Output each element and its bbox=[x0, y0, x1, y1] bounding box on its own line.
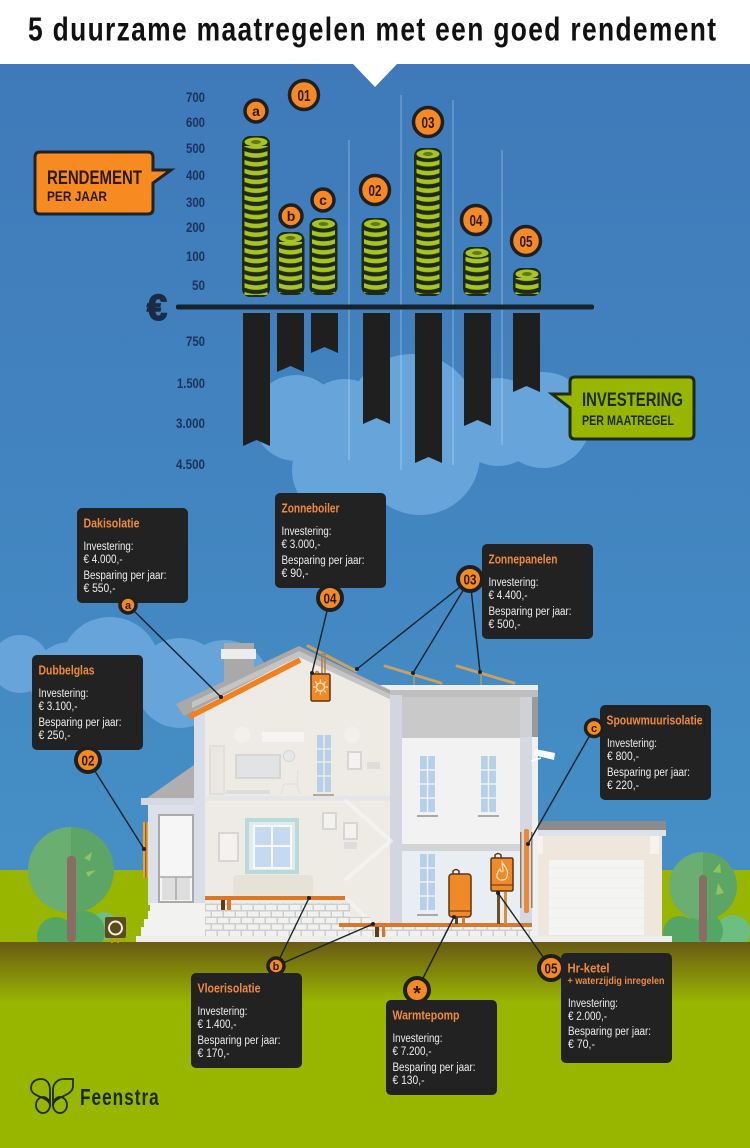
panel: Warmtepomp: € 7.200,- bbox=[392, 1046, 432, 1058]
investment axis labels: 4.500 bbox=[176, 456, 205, 472]
axis line bbox=[176, 304, 594, 310]
panel: Hr-ketel bbox=[561, 953, 672, 1063]
logo: Feenstra: Feenstra bbox=[80, 1086, 159, 1111]
panel: Hr-ketel: Besparing per jaar: bbox=[568, 1026, 651, 1038]
panel: Warmtepomp: € 130,- bbox=[392, 1075, 425, 1087]
chimney bbox=[221, 643, 256, 687]
panel: Zonneboiler: Besparing per jaar: bbox=[282, 555, 364, 567]
roof bbox=[176, 646, 390, 716]
solar panels bbox=[308, 646, 514, 684]
callout: investering per maatregel: INVESTERING bbox=[582, 390, 683, 411]
callout: rendement per jaar bbox=[35, 152, 171, 214]
chart badge c: c bbox=[319, 192, 327, 208]
marker b bbox=[268, 958, 284, 974]
marker 02: 02 bbox=[82, 754, 94, 770]
return axis labels: 400 bbox=[186, 167, 205, 183]
marker c bbox=[586, 720, 602, 736]
panel: Spouwmuurisolatie: Investering: bbox=[607, 738, 657, 750]
porch bbox=[141, 765, 205, 937]
panel: Zonneboiler: € 90,- bbox=[282, 568, 309, 580]
cloud behind house bbox=[0, 617, 270, 730]
marker heat pump bbox=[405, 978, 429, 1005]
panel: Zonnepanelen bbox=[482, 544, 593, 639]
chart badge 01: 01 bbox=[298, 88, 311, 105]
coin stack b bbox=[276, 232, 304, 295]
investment axis labels: 1.500 bbox=[177, 375, 205, 391]
panel: Vloerisolatie: € 1.400,- bbox=[198, 1019, 237, 1031]
callout: investering per maatregel: PER MAATREGEL bbox=[582, 412, 674, 428]
return axis labels: 100 bbox=[186, 248, 205, 264]
ground floor insulation bbox=[205, 896, 532, 937]
background: soil and lawn bbox=[0, 942, 750, 1148]
chart badge 04: 04 bbox=[470, 213, 483, 230]
chart badge a: a bbox=[252, 103, 260, 119]
chart badge 05: 05 bbox=[520, 234, 533, 251]
marker a bbox=[120, 597, 136, 613]
panel: Spouwmuurisolatie: € 220,- bbox=[607, 780, 639, 792]
return axis labels: 200 bbox=[186, 219, 205, 235]
panel: Dakisolatie: € 4.000,- bbox=[84, 554, 123, 566]
investment axis labels: 3.000 bbox=[176, 415, 205, 431]
panel: Vloerisolatie: Investering: bbox=[198, 1006, 248, 1018]
chart badge 01 bbox=[290, 80, 318, 110]
marker 02 bbox=[76, 748, 100, 772]
panel: Zonneboiler: Zonneboiler bbox=[282, 502, 340, 516]
chart badge c bbox=[312, 189, 334, 211]
panel: Warmtepomp: Investering: bbox=[392, 1033, 442, 1045]
return axis labels: 500 bbox=[186, 140, 205, 156]
marker c: c bbox=[591, 723, 597, 735]
heat pump icon bbox=[449, 870, 471, 924]
panel: Dakisolatie bbox=[77, 508, 188, 603]
investment axis labels bbox=[176, 333, 205, 472]
coin stacks chart bbox=[242, 136, 541, 297]
tree left bbox=[28, 827, 118, 955]
panel: Warmtepomp: Warmtepomp bbox=[392, 1008, 460, 1022]
wall cavity insulation bbox=[520, 829, 532, 913]
coin stack c bbox=[310, 218, 338, 295]
right block bbox=[372, 685, 538, 942]
euro sign: € bbox=[147, 287, 167, 328]
panel: Hr-ketel: Investering: bbox=[568, 998, 618, 1010]
title banner: 5 duurzame maatregelen met een goed rendement bbox=[28, 12, 716, 48]
return axis labels: 50 bbox=[192, 277, 205, 293]
double glazing strip bbox=[143, 822, 148, 878]
panel: Hr-ketel: € 2.000,- bbox=[568, 1011, 607, 1023]
marker heat pump: * bbox=[413, 983, 421, 1005]
panel: Warmtepomp: Besparing per jaar: bbox=[392, 1062, 476, 1074]
chart badge b bbox=[280, 205, 302, 227]
leader lines bbox=[88, 579, 594, 990]
panel: Dubbelglas bbox=[32, 655, 143, 750]
panel: Spouwmuurisolatie: € 800,- bbox=[607, 751, 639, 763]
panel: Spouwmuurisolatie: Besparing per jaar: bbox=[607, 767, 690, 779]
roof insulation bbox=[189, 660, 300, 717]
panel: Warmtepomp bbox=[386, 1000, 497, 1095]
panel: Hr-ketel: € 70,- bbox=[568, 1039, 595, 1051]
chart badge 02 bbox=[360, 176, 390, 204]
chart badge 05 bbox=[512, 226, 540, 256]
panel: Dubbelglas: € 250,- bbox=[38, 730, 71, 742]
leader line end dots bbox=[142, 667, 530, 926]
marker 03 bbox=[458, 567, 482, 591]
panel: Vloerisolatie: Vloerisolatie bbox=[198, 982, 261, 996]
coin stack 03 bbox=[414, 148, 442, 296]
panel: Zonnepanelen: Investering: bbox=[488, 577, 538, 589]
panel: Spouwmuurisolatie: Spouwmuurisolatie bbox=[606, 714, 703, 728]
panel: Hr-ketel: Hr-ketel bbox=[568, 962, 610, 976]
panel: Zonnepanelen: € 500,- bbox=[488, 619, 521, 631]
panel: Hr-ketel: + waterzijdig inregelen bbox=[568, 975, 664, 987]
title banner bbox=[0, 0, 750, 87]
main gabled block bbox=[194, 652, 402, 942]
investment ribbon bars bbox=[243, 313, 540, 463]
brick foundation bbox=[136, 903, 672, 942]
panel: Vloerisolatie: € 170,- bbox=[198, 1048, 230, 1060]
panel: Zonneboiler: € 3.000,- bbox=[282, 539, 321, 551]
coin stack 02 bbox=[362, 218, 390, 295]
marker b: b bbox=[273, 961, 280, 973]
panel: Vloerisolatie: Besparing per jaar: bbox=[198, 1035, 280, 1047]
return axis labels bbox=[186, 89, 205, 293]
tree right bbox=[663, 852, 750, 950]
chart badge a bbox=[245, 100, 267, 122]
investment axis labels: 750 bbox=[186, 333, 205, 349]
garage bbox=[531, 821, 666, 942]
panel: Dubbelglas: Investering: bbox=[38, 688, 88, 700]
marker 03: 03 bbox=[464, 572, 476, 588]
vertical guide lines bbox=[349, 95, 502, 470]
logo mark bbox=[31, 1079, 73, 1113]
return axis labels: 300 bbox=[186, 194, 205, 210]
panel: Dakisolatie: € 550,- bbox=[84, 583, 116, 595]
panel: Dakisolatie: Besparing per jaar: bbox=[84, 570, 166, 582]
marker 04: 04 bbox=[324, 592, 336, 608]
marker 05: 05 bbox=[544, 962, 558, 978]
marker 05 bbox=[539, 956, 563, 980]
return axis labels: 600 bbox=[186, 114, 205, 130]
chart badge 04 bbox=[462, 206, 490, 234]
panel: Dubbelglas: Dubbelglas bbox=[38, 664, 95, 678]
chart badge 03: 03 bbox=[422, 115, 435, 132]
panel: Vloerisolatie bbox=[191, 973, 302, 1068]
chart badge 03 bbox=[414, 108, 442, 136]
chart badge b: b bbox=[287, 208, 295, 224]
callout: investering per maatregel bbox=[552, 377, 694, 439]
panel: Dubbelglas: Besparing per jaar: bbox=[38, 717, 122, 729]
solar boiler icon bbox=[311, 654, 330, 701]
marker a: a bbox=[125, 600, 132, 612]
panel: Zonnepanelen: Zonnepanelen bbox=[488, 552, 558, 566]
panel: Zonneboiler bbox=[275, 493, 386, 588]
panel: Dubbelglas: € 3.100,- bbox=[38, 701, 78, 713]
panel: Zonnepanelen: € 4.400,- bbox=[488, 590, 528, 602]
coin stack 04 bbox=[463, 247, 491, 296]
coin stack 05 bbox=[513, 268, 541, 296]
panel: Zonnepanelen: Besparing per jaar: bbox=[488, 606, 572, 618]
cloud behind investment bars bbox=[253, 354, 591, 518]
security camera bbox=[531, 749, 555, 761]
panel: Dakisolatie: Dakisolatie bbox=[84, 516, 140, 530]
logo: Feenstra bbox=[31, 1079, 159, 1113]
garden sign bbox=[105, 917, 126, 943]
hr boiler icon bbox=[491, 854, 513, 924]
background: sky bbox=[0, 64, 750, 870]
chart badge 02: 02 bbox=[368, 183, 382, 200]
panel: Dakisolatie: Investering: bbox=[84, 541, 134, 553]
callout: rendement per jaar: PER JAAR bbox=[47, 188, 107, 204]
callout: rendement per jaar: RENDEMENT bbox=[47, 168, 142, 189]
panel: Zonneboiler: Investering: bbox=[282, 526, 332, 538]
panel: Spouwmuurisolatie bbox=[600, 705, 711, 800]
background: grass bbox=[0, 870, 750, 942]
coin stack a bbox=[242, 136, 270, 297]
return axis labels: 700 bbox=[186, 89, 205, 105]
house illustration bbox=[136, 643, 672, 942]
marker 04 bbox=[318, 586, 342, 610]
